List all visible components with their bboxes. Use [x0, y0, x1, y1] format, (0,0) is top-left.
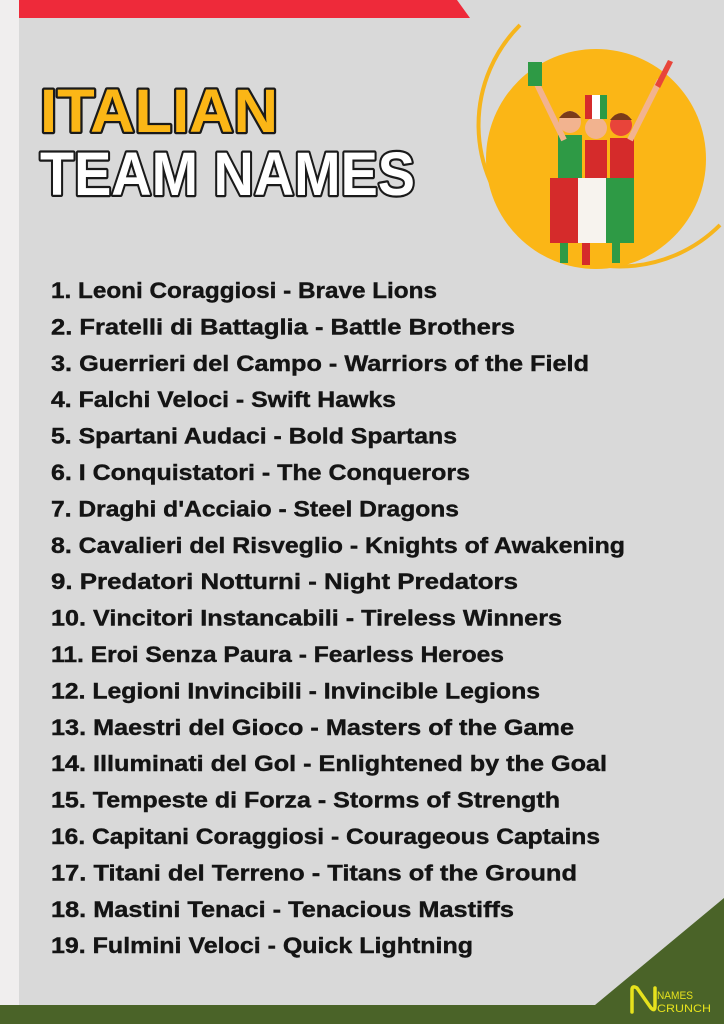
logo: names crunch	[632, 987, 711, 1015]
list of team names: 16. Capitani Coraggiosi - Courageous Captains	[51, 824, 600, 849]
list of team names: 12. Legioni Invincibili - Invincible Legions	[51, 678, 540, 703]
list of team names: 7. Draghi d'Acciaio - Steel Dragons	[51, 496, 459, 521]
list of team names: 17. Titani del Terreno - Titans of the Ground	[51, 860, 577, 885]
list of team names: 1. Leoni Coraggiosi - Brave Lions	[51, 278, 437, 303]
list of team names: 18. Mastini Tenaci - Tenacious Mastiffs	[51, 897, 514, 922]
logo: names crunch: CRUNCH	[657, 1003, 711, 1015]
list of team names: 13. Maestri del Gioco - Masters of the Game	[51, 715, 574, 740]
logo: names crunch: NAMES	[657, 990, 693, 1002]
list of team names: 14. Illuminati del Gol - Enlightened by the Goal	[51, 751, 607, 776]
fans figures	[528, 60, 673, 265]
list of team names: 10. Vincitori Instancabili - Tireless Winners	[51, 606, 562, 631]
title: ITALIAN	[40, 77, 278, 145]
list of team names	[51, 278, 625, 958]
list of team names: 8. Cavalieri del Risveglio - Knights of Awakening	[51, 533, 625, 558]
list of team names: 3. Guerrieri del Campo - Warriors of the Field	[51, 351, 589, 376]
list of team names: 2. Fratelli di Battaglia - Battle Brothers	[51, 314, 515, 339]
list of team names: 5. Spartani Audaci - Bold Spartans	[51, 424, 457, 449]
list of team names: 19. Fulmini Veloci - Quick Lightning	[51, 933, 473, 958]
green footer	[0, 898, 724, 1024]
list of team names: 6. I Conquistatori - The Conquerors	[51, 460, 470, 485]
red top bar	[19, 0, 470, 18]
icon: fans circle	[479, 25, 720, 269]
title	[40, 77, 415, 208]
list of team names: 9. Predatori Notturni - Night Predators	[51, 569, 518, 594]
title: TEAM NAMES	[40, 140, 415, 208]
list of team names: 11. Eroi Senza Paura - Fearless Heroes	[51, 642, 504, 667]
list of team names: 4. Falchi Veloci - Swift Hawks	[51, 387, 396, 412]
list of team names: 15. Tempeste di Forza - Storms of Strength	[51, 788, 560, 813]
